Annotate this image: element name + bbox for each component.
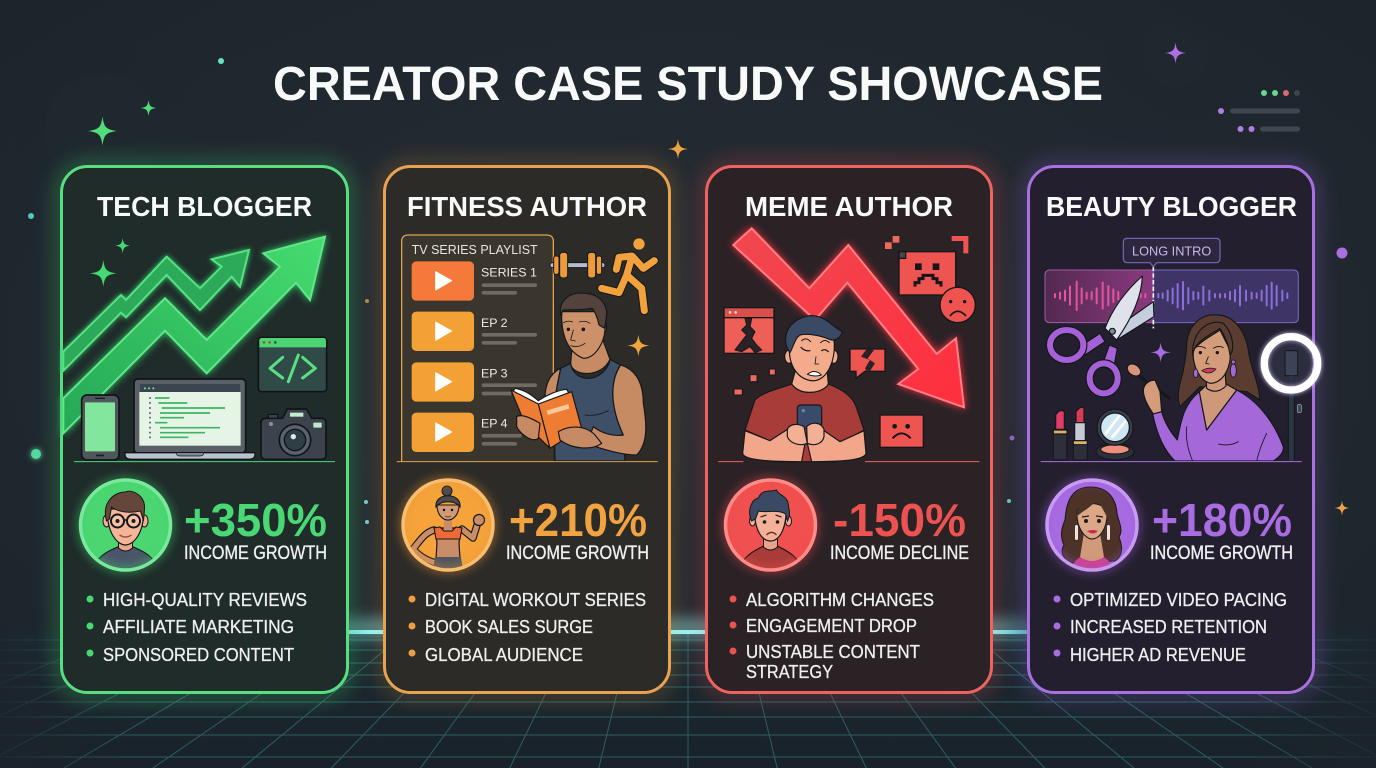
icon: sad pixel face	[880, 415, 923, 447]
stat: +350%: +350%	[184, 494, 327, 546]
bullet list: DIGITAL WORKOUT SERIES	[425, 589, 646, 610]
icon: sparkle	[627, 335, 649, 357]
bullet list: OPTIMIZED VIDEO PACING	[1070, 589, 1287, 610]
floor grid	[0, 618, 1376, 768]
icon: compact mirror	[1096, 409, 1134, 460]
playlist item: ep 2: EP 2	[481, 316, 508, 330]
stat label: INCOME GROWTH	[506, 543, 649, 564]
illustration: fitness	[397, 235, 658, 462]
bullet list: BOOK SALES SURGE	[425, 616, 593, 637]
bullet list: INCREASED RETENTION	[1070, 616, 1267, 637]
icon: ring light	[1264, 337, 1318, 462]
title: CREATOR CASE STUDY SHOWCASE	[273, 58, 1103, 111]
heading: beauty blogger: BEAUTY BLOGGER	[1046, 191, 1297, 222]
heading: fitness author: FITNESS AUTHOR	[407, 191, 647, 222]
icon: sparkle	[1151, 342, 1171, 362]
bullet list	[86, 589, 307, 665]
stat label: INCOME GROWTH	[184, 543, 327, 564]
icon: phone	[82, 395, 119, 460]
icon: broken chat bubble	[850, 349, 885, 378]
panel: meme author	[706, 166, 992, 694]
figure: woman with brush	[1125, 315, 1283, 461]
playlist item: series 1: SERIES 1	[481, 266, 537, 280]
icon: code window	[258, 337, 327, 392]
playlist heading: TV SERIES PLAYLIST	[412, 243, 538, 257]
stat: +180%: +180%	[1152, 494, 1292, 546]
bullet list: ENGAGEMENT DROP	[746, 615, 917, 636]
stat: -150%: -150%	[833, 494, 966, 546]
bullet list: STRATEGY	[746, 661, 833, 682]
bullet list: HIGH-QUALITY REVIEWS	[103, 589, 307, 610]
icon: runner	[602, 238, 654, 311]
decorative status dots and bars	[1218, 90, 1300, 132]
avatar: tech blogger	[80, 480, 170, 571]
bullet list	[1054, 589, 1287, 665]
figure: worried person	[743, 316, 866, 462]
bullet list: AFFILIATE MARKETING	[103, 616, 294, 637]
playlist item: series 1	[412, 261, 537, 301]
bullet list	[730, 589, 934, 682]
avatar: fitness author	[403, 480, 493, 571]
bullet list: HIGHER AD REVENUE	[1070, 644, 1246, 665]
icon: pixel squares	[885, 236, 899, 249]
playlist item: ep 2	[412, 312, 537, 351]
icon: lipsticks	[1053, 407, 1087, 460]
icon: sparkles	[90, 238, 130, 287]
icon: pixel squares left	[734, 369, 775, 395]
panel: tv series playlist	[402, 235, 553, 462]
arrow: small growth arrow	[63, 250, 249, 371]
bullet list	[408, 589, 646, 665]
figure: man reading	[511, 293, 646, 461]
stat: +210%: +210%	[509, 494, 647, 546]
playlist item: ep 4	[412, 413, 522, 452]
panel: beauty blogger	[1028, 166, 1318, 694]
stat label: INCOME DECLINE	[830, 543, 969, 564]
illustration: decline	[718, 228, 979, 462]
icon: sad face	[940, 287, 975, 323]
icon: sad pixel screen	[899, 252, 956, 295]
playlist item: ep 4: EP 4	[481, 417, 508, 431]
playlist item: ep 3: EP 3	[481, 366, 508, 380]
waveform timeline	[1045, 267, 1298, 328]
bullet list: UNSTABLE CONTENT	[746, 641, 920, 662]
heading: tech blogger: TECH BLOGGER	[97, 191, 312, 222]
arrow: large growth arrow	[63, 237, 325, 433]
heading: meme author: MEME AUTHOR	[745, 191, 953, 222]
callout: long intro: LONG INTRO	[1132, 244, 1211, 258]
decorative sparkles and dots	[28, 42, 1350, 524]
icon: barbell	[550, 252, 605, 278]
icon: scissors	[1050, 276, 1154, 393]
icon: broken window	[724, 308, 774, 353]
illustration: tech growth	[63, 237, 335, 462]
bullet list: ALGORITHM CHANGES	[746, 589, 934, 610]
arrow: decline arrow	[733, 228, 964, 407]
bullet list: GLOBAL AUDIENCE	[425, 644, 583, 665]
callout: long intro	[1123, 238, 1220, 267]
playlist item: ep 3	[412, 362, 537, 402]
bullet list: SPONSORED CONTENT	[103, 644, 294, 665]
icon: pixel bracket	[952, 236, 968, 253]
stat label: INCOME GROWTH	[1150, 543, 1293, 564]
panel: fitness author	[384, 166, 670, 694]
panel: tech blogger	[61, 166, 348, 694]
icon: camera	[261, 409, 326, 459]
icon: laptop with code	[125, 379, 255, 459]
avatar: meme author	[726, 480, 816, 571]
avatar: beauty blogger	[1047, 480, 1137, 571]
illustration: beauty	[1041, 238, 1318, 462]
